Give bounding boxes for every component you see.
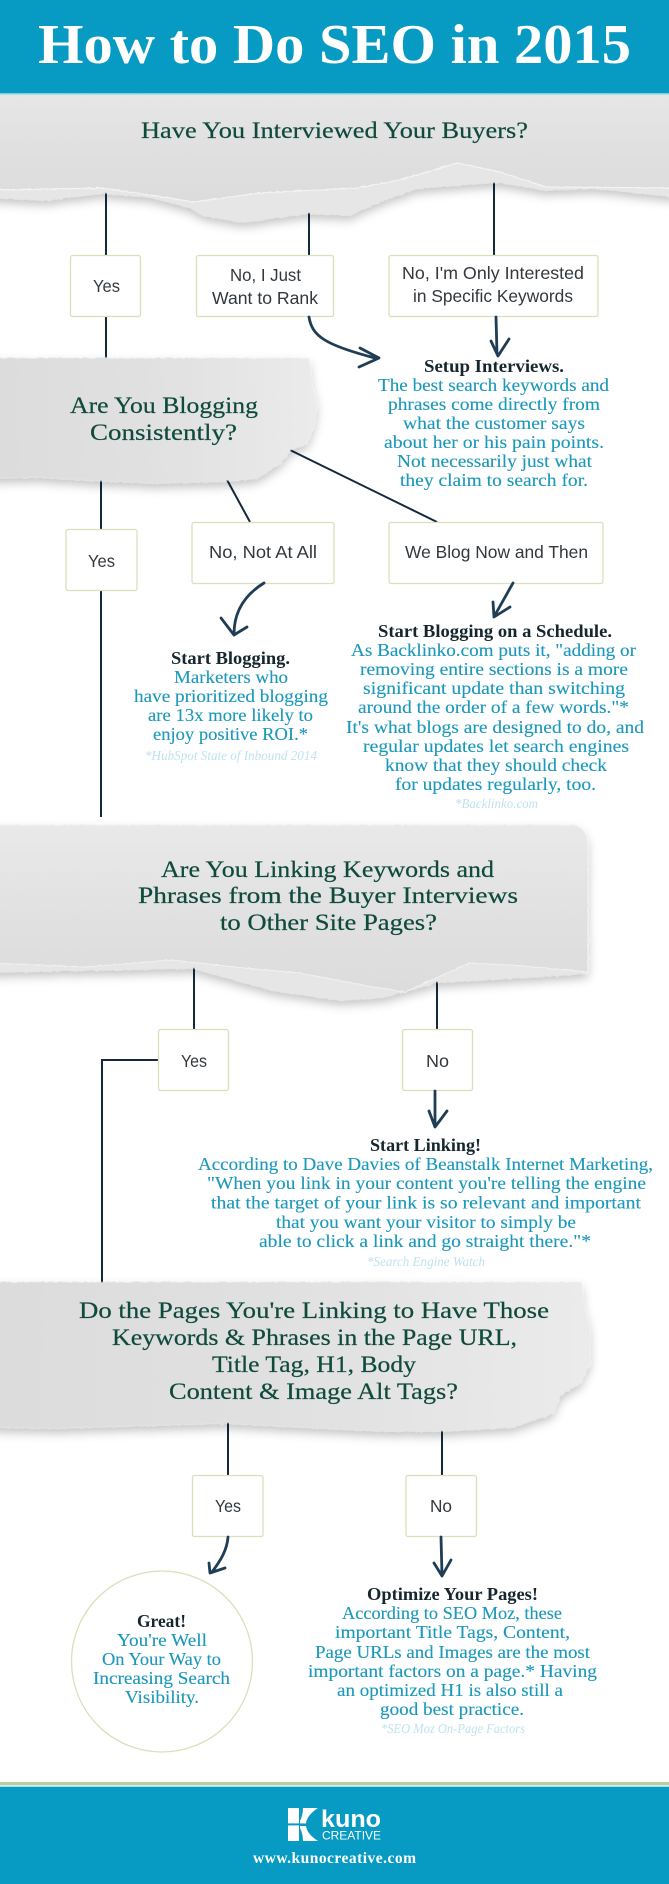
- option box: No: No: [426, 1051, 449, 1071]
- option box: No, I'm Only Interested in Specific Keywords: No, I'm Only Interested: [402, 263, 584, 283]
- text block: optimize your pages: an optimized H1 is also still a: [337, 1680, 563, 1700]
- text block: setup interviews: [378, 356, 609, 490]
- option box: No: No: [430, 1496, 452, 1516]
- option box: No, I'm Only Interested in Specific Keywords: [389, 256, 598, 316]
- connector lines from question 1: [106, 175, 494, 362]
- text block: optimize your pages: According to SEO Moz, these: [342, 1603, 562, 1623]
- text block: setup interviews: they claim to search for.: [400, 470, 588, 490]
- panel: question 3 torn paper: Phrases from the Buyer Interviews: [138, 883, 518, 909]
- option box: Yes: [192, 1476, 263, 1536]
- text block: optimize your pages: Page URLs and Images are the most: [315, 1642, 590, 1662]
- text block: start linking: "When you link in your content you're telling the engine: [207, 1173, 646, 1193]
- option box: We Blog Now and Then: [389, 522, 603, 584]
- connector lines from question 3: [194, 960, 437, 1029]
- circle callout: great: [72, 1571, 252, 1752]
- text block: start blogging on a schedule: It's what blogs are designed to do, and: [346, 717, 644, 737]
- text block: start blogging on a schedule: regular updates let search engines: [363, 736, 629, 756]
- panel: question 3 torn paper: [0, 825, 588, 1000]
- connector lines from question 4: [228, 1415, 442, 1475]
- panel: question 1 torn paper: [0, 70, 669, 222]
- text block: start linking: [198, 1135, 653, 1269]
- text block: start blogging: Start Blogging.: [171, 648, 290, 668]
- option box: Yes: [158, 1030, 228, 1090]
- circle callout: great: You're Well: [117, 1630, 207, 1650]
- option box: Yes: Yes: [215, 1496, 241, 1516]
- text block: optimize your pages: important factors on a page.* Having: [308, 1661, 597, 1681]
- text block: start linking: able to click a link and go straight there."*: [259, 1231, 591, 1251]
- arrow: to start linking: [429, 1091, 447, 1127]
- text block: optimize your pages: important Title Tags, Content,: [335, 1622, 570, 1642]
- text block: setup interviews: Setup Interviews.: [424, 356, 564, 376]
- arrow: rank to setup interviews: [309, 317, 379, 367]
- option box: No, I Just Want to Rank: Want to Rank: [212, 288, 318, 308]
- option box: No: [402, 1030, 472, 1090]
- text block: start blogging: *HubSpot State of Inbound 2014: [145, 748, 317, 763]
- text block: start blogging on a schedule: significant update than switching: [363, 678, 625, 698]
- text block: setup interviews: phrases come directly from: [388, 394, 600, 414]
- circle callout: great: On Your Way to: [102, 1649, 221, 1669]
- text block: start blogging: are 13x more likely to: [148, 705, 313, 725]
- option box: We Blog Now and Then: We Blog Now and Then: [405, 542, 588, 562]
- text block: optimize your pages: [308, 1584, 597, 1736]
- circle callout: great: Visibility.: [125, 1687, 199, 1707]
- arrow: to optimize pages: [434, 1537, 451, 1576]
- text block: start blogging on a schedule: around the order of a few words."*: [358, 697, 629, 717]
- option box: No, I Just Want to Rank: No, I Just: [230, 265, 301, 285]
- text block: setup interviews: what the customer says: [403, 413, 585, 433]
- option box: No, Not At All: No, Not At All: [209, 542, 317, 562]
- text block: setup interviews: The best search keywords and: [378, 375, 609, 395]
- text block: start blogging: Marketers who: [174, 667, 288, 687]
- heading: Are You Linking Keywords and: [161, 857, 494, 883]
- text block: start linking: that you want your visitor to simply be: [276, 1212, 576, 1232]
- website url: www.kunocreative.com: [253, 1850, 416, 1867]
- heading: Have You Interviewed Your Buyers?: [141, 118, 528, 144]
- footer band: [0, 1782, 669, 1884]
- panel: question 4 torn paper: Content & Image Alt Tags?: [169, 1379, 458, 1405]
- option box: Yes: Yes: [93, 276, 120, 296]
- text block: setup interviews: about her or his pain points.: [384, 432, 604, 452]
- panel: question 4 torn paper: [0, 1282, 590, 1431]
- arrow: to start blogging: [221, 583, 264, 635]
- option box: No, I Just Want to Rank: [196, 256, 334, 316]
- text block: start blogging: [134, 648, 328, 763]
- text block: start blogging on a schedule: for updates regularly, too.: [395, 774, 596, 794]
- option box: Yes: [70, 256, 140, 316]
- text block: optimize your pages: good best practice.: [380, 1699, 524, 1719]
- option box: No: [406, 1476, 476, 1536]
- arrow: to blogging schedule: [493, 583, 513, 617]
- text block: start blogging on a schedule: Start Blogging on a Schedule.: [378, 621, 612, 641]
- text block: optimize your pages: Optimize Your Pages!: [367, 1584, 538, 1604]
- option box: No, I'm Only Interested in Specific Keywords: in Specific Keywords: [413, 286, 573, 306]
- panel: question 2 torn paper: [0, 358, 317, 483]
- option box: Yes: Yes: [181, 1051, 207, 1071]
- text block: optimize your pages: *SEO Moz On-Page Factors: [381, 1721, 525, 1736]
- text block: start linking: Start Linking!: [370, 1135, 481, 1155]
- text block: start blogging on a schedule: As Backlinko.com puts it, "adding or: [351, 640, 636, 660]
- text block: start blogging: have prioritized blogging: [134, 686, 328, 706]
- arrow: to great circle: [209, 1537, 228, 1573]
- text block: start blogging on a schedule: removing entire sections is a more: [360, 659, 628, 679]
- icon: kuno logo mark: [288, 1808, 318, 1841]
- title banner: [0, 0, 669, 94]
- text block: start blogging on a schedule: know that they should check: [385, 755, 607, 775]
- text block: setup interviews: Not necessarily just what: [397, 451, 592, 471]
- heading: Are You Blogging: [70, 393, 258, 419]
- connector lines from question 2: [101, 450, 437, 817]
- text block: start linking: According to Dave Davies of Beanstalk Internet Marketing,: [198, 1154, 653, 1174]
- option box: No, Not At All: [192, 522, 334, 584]
- logo wordmark: kuno: [321, 1806, 381, 1833]
- text block: start blogging on a schedule: [346, 621, 644, 811]
- option box: Yes: [66, 530, 137, 590]
- panel: question 2 torn paper: Consistently?: [90, 420, 237, 446]
- arrow: keywords to setup interviews: [491, 317, 509, 356]
- connector: yes to question 4: [102, 1060, 158, 1287]
- option box: Yes: Yes: [88, 551, 115, 571]
- panel: question 3 torn paper: to Other Site Pages?: [220, 910, 437, 936]
- text block: start blogging on a schedule: *Backlinko.com: [455, 796, 538, 811]
- heading: Do the Pages You're Linking to Have Those: [79, 1298, 549, 1324]
- circle callout: great: Increasing Search: [93, 1668, 230, 1688]
- text block: start linking: *Search Engine Watch: [367, 1254, 485, 1269]
- text block: start linking: that the target of your link is so relevant and important: [211, 1192, 641, 1212]
- circle callout: great: Great!: [137, 1611, 186, 1631]
- panel: question 4 torn paper: Keywords & Phrases in the Page URL,: [112, 1325, 517, 1351]
- text block: start blogging: enjoy positive ROI.*: [153, 724, 308, 744]
- panel: question 4 torn paper: Title Tag, H1, Body: [212, 1352, 416, 1378]
- logo wordmark: CREATIVE: [322, 1830, 381, 1842]
- title: How to Do SEO in 2015: [38, 14, 631, 76]
